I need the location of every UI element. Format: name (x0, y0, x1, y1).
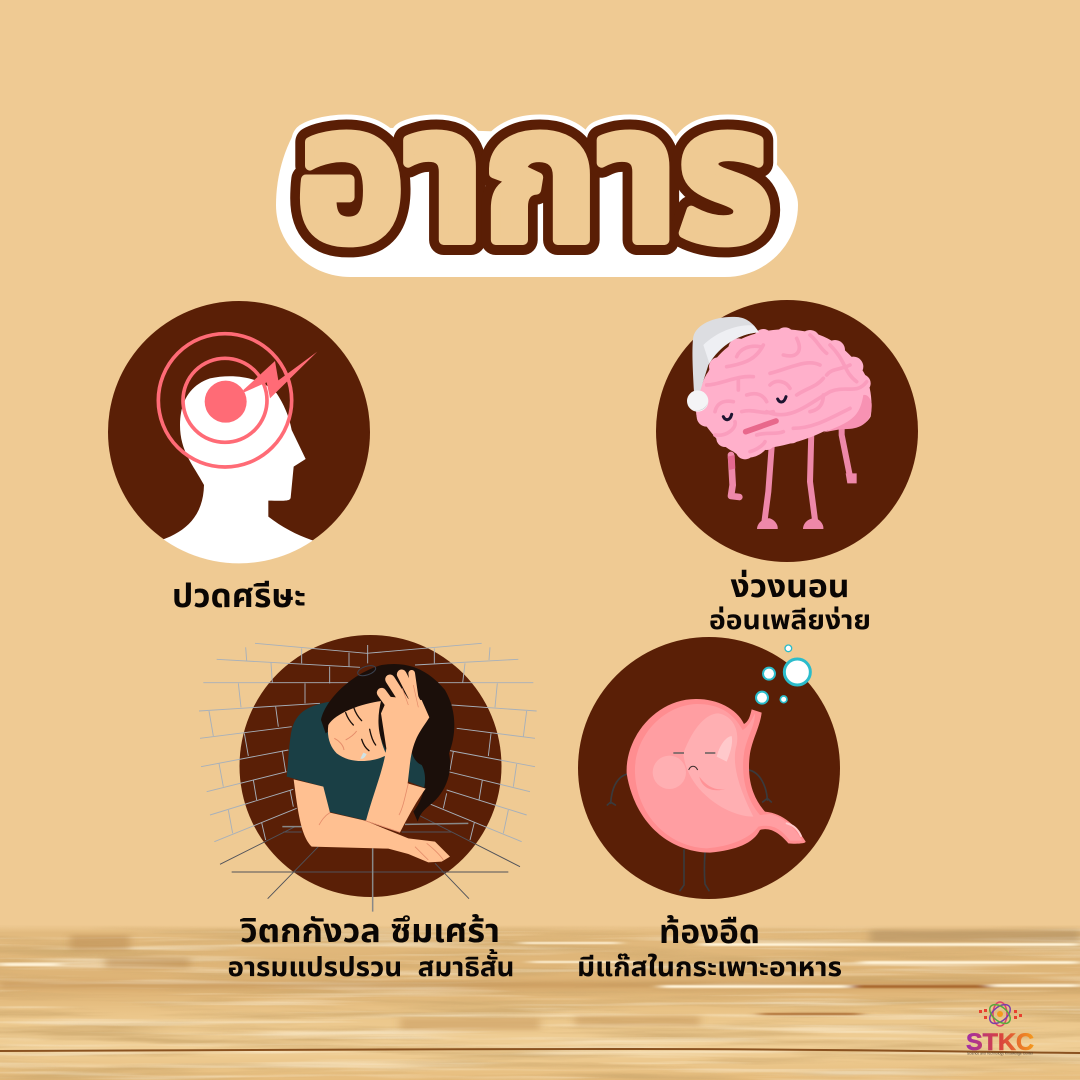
label (709, 568, 871, 635)
icon: sleepy brain (687, 317, 872, 529)
label (577, 913, 842, 982)
label: ท้องอืด (659, 913, 760, 950)
title white outline: อาการ (296, 69, 772, 279)
logo tagline: Science and Technology Knowledge Center (967, 1052, 1034, 1056)
label: ง่วงนอน (730, 568, 850, 604)
circle background (240, 635, 502, 897)
title dark outline: อาการ (296, 70, 772, 280)
circle background (656, 300, 918, 562)
circle background (108, 301, 370, 563)
label: อารมแปรปรวน สมาธิสั้น (228, 949, 514, 982)
icon: gas bubbles (756, 645, 810, 704)
illustration: worried woman (287, 664, 454, 862)
wooden table (0, 925, 1080, 1080)
icon: head with pain rings (157, 334, 317, 572)
logo: STKC (966, 1001, 1034, 1056)
circle background (578, 637, 840, 899)
label: วิตกกังวล ซึมเศร้า (240, 912, 500, 949)
label (228, 912, 514, 982)
panel: headache (108, 301, 370, 614)
panel: bloating (577, 637, 842, 982)
panel: drowsy (656, 300, 918, 635)
logo atom icon (979, 1001, 1022, 1027)
title lettering: อาการ (296, 70, 772, 280)
label: อ่อนเพลียง่าย (709, 605, 871, 635)
label: ปวดศรีษะ (172, 577, 306, 614)
illustration: brick wall (199, 643, 537, 842)
title: อาการ (276, 69, 798, 280)
title white backing (276, 125, 798, 277)
icon: sad stomach (607, 699, 806, 891)
panel: anxiety (199, 635, 537, 982)
illustration: bottom lines (220, 815, 520, 912)
label: มีแก๊สในกระเพาะอาหาร (577, 952, 842, 982)
logo wordmark: STKC (966, 1029, 1034, 1056)
